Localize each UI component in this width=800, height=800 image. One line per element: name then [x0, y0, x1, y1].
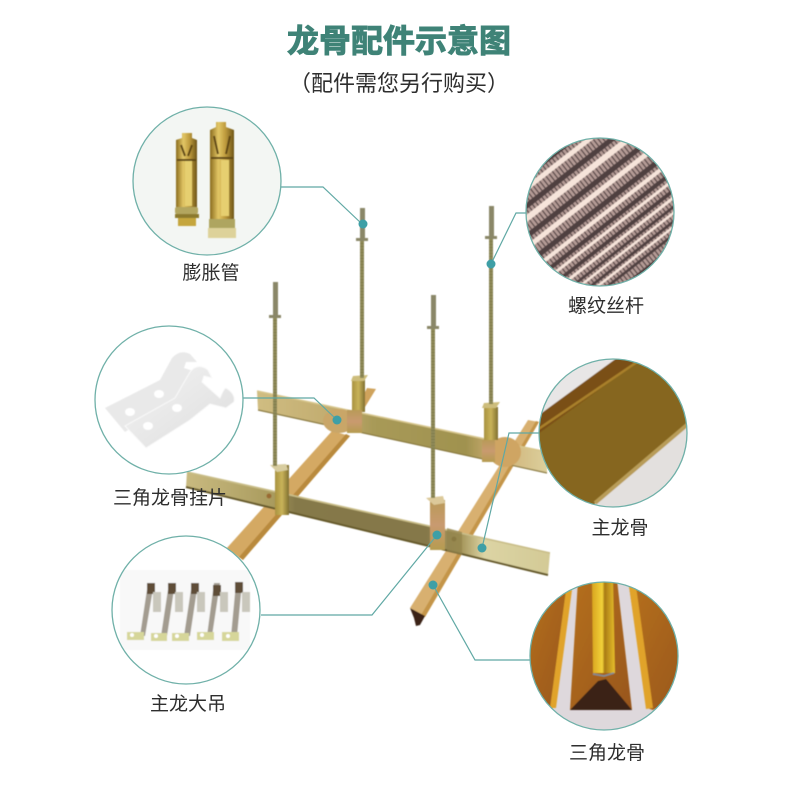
panel: threaded rod circle	[525, 137, 675, 287]
marker dots	[332, 220, 496, 590]
label: expansion bolt: 膨胀管	[182, 262, 240, 284]
keel frame assembly	[186, 206, 550, 626]
left triangular rail	[226, 388, 376, 560]
label: main keel hanger: 主龙大吊	[150, 693, 226, 715]
panel: expansion bolts circle	[133, 107, 281, 255]
panel: triangular keel circle	[525, 580, 690, 730]
rod highlights	[526, 139, 674, 286]
icon: large bolt	[208, 122, 236, 238]
front main beam	[186, 472, 550, 575]
label: triangular keel: 三角龙骨	[569, 742, 645, 764]
right triangular rail	[410, 420, 539, 626]
label: main keel: 主龙骨	[591, 517, 649, 539]
icon: small bolt	[175, 133, 199, 226]
title: 龙骨配件示意图	[287, 23, 511, 59]
rod shading	[526, 138, 674, 286]
icon: hanger clips	[127, 582, 250, 641]
label: threaded rod: 螺纹丝杆	[568, 295, 644, 317]
subtitle: （配件需您另行购买）	[289, 71, 509, 96]
back main beam	[257, 391, 547, 473]
threaded rods with expansion bolts	[269, 206, 497, 498]
panel: triangular keel hanger circle	[95, 326, 243, 474]
panel: main keel hanger circle	[112, 536, 260, 684]
leader lines	[243, 187, 540, 660]
panel: main keel circle	[538, 358, 688, 508]
hanger brackets	[270, 375, 500, 550]
label: triangular keel hanger: 三角龙骨挂片	[113, 487, 227, 509]
icon: back hanger plate	[105, 352, 197, 432]
icon: front hanger plate	[125, 366, 234, 448]
